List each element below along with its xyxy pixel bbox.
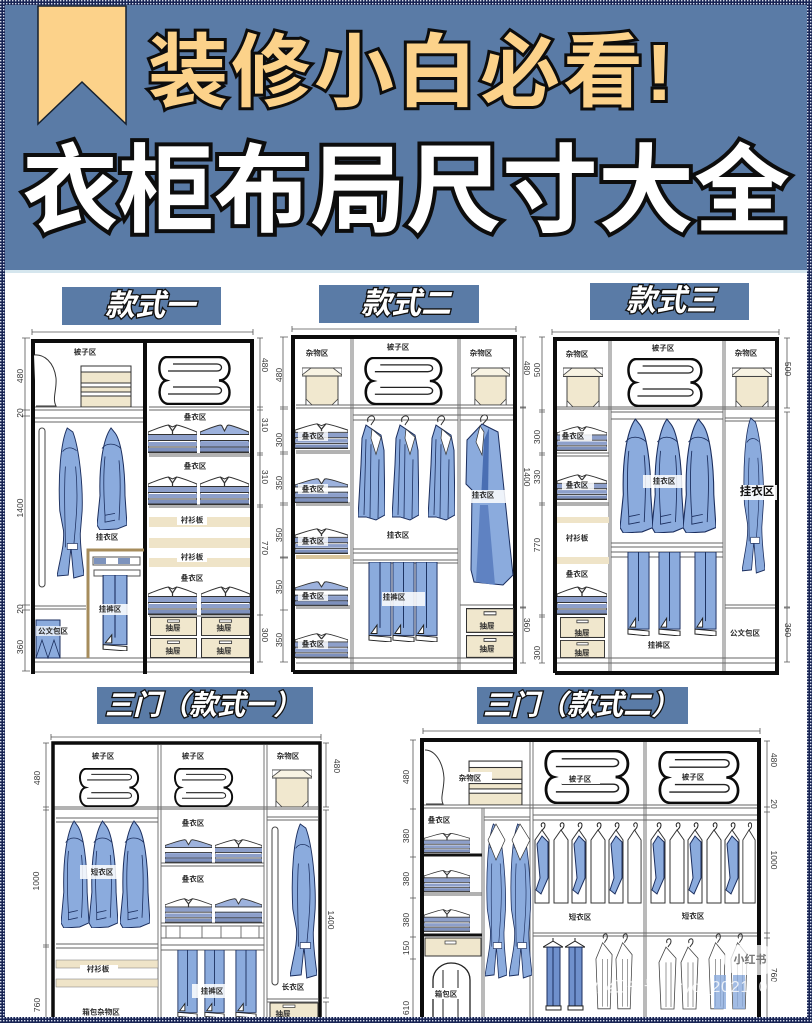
width dimension bbox=[423, 728, 760, 734]
interior shelves and rails bbox=[35, 407, 250, 672]
dimensions left bbox=[31, 743, 49, 1018]
frame bbox=[293, 337, 515, 672]
watermark badge: 小红书 bbox=[734, 952, 766, 966]
dimensions right bbox=[323, 743, 342, 1018]
dimensions left: 20 bbox=[15, 408, 25, 418]
heading: style two bbox=[319, 285, 479, 323]
dimensions left: 480 bbox=[15, 369, 25, 383]
frame bbox=[33, 341, 252, 674]
drawer bbox=[270, 1003, 318, 1018]
folded clothes and shirt boards bbox=[557, 427, 609, 615]
long coat bbox=[290, 824, 317, 978]
hanging jackets: 挂衣区 bbox=[653, 476, 676, 486]
dimensions right (inner): 300 bbox=[260, 628, 270, 642]
folded clothes rows: 叠衣区 bbox=[184, 460, 207, 470]
folded clothes: 叠衣区 bbox=[428, 814, 451, 824]
hanging trousers: 挂裤区 bbox=[201, 986, 224, 996]
dimensions left bbox=[401, 740, 416, 1018]
dimensions right bbox=[764, 741, 779, 1018]
drawers: 抽屉 bbox=[216, 646, 232, 656]
folded clothes column: 叠衣区 bbox=[302, 430, 325, 440]
dimensions left: 350 bbox=[274, 528, 284, 542]
backpack: 箱包区 bbox=[435, 988, 458, 998]
luggage label: 箱包杂物区 bbox=[82, 1006, 120, 1016]
drawer bbox=[425, 938, 481, 956]
frame bbox=[53, 743, 320, 1018]
trousers middle bbox=[543, 934, 632, 1010]
folded clothes column bbox=[295, 424, 348, 658]
right storage label: 杂物区 bbox=[277, 750, 300, 760]
dimensions left: 380 bbox=[401, 829, 411, 843]
quilt label: 被子区 bbox=[387, 342, 410, 352]
dimensions left: 760 bbox=[32, 998, 42, 1012]
folded clothes and shirt boards: 叠衣区 bbox=[566, 568, 589, 578]
short clothes label right: 短衣区 bbox=[682, 910, 705, 920]
dimensions left: 360 bbox=[15, 640, 25, 654]
heading: style one bbox=[62, 287, 221, 325]
dimensions right: 500 bbox=[783, 362, 793, 376]
folded clothes column: 叠衣区 bbox=[302, 590, 325, 600]
drawers: 抽屉 bbox=[480, 644, 495, 654]
dimensions left: 350 bbox=[274, 580, 284, 594]
short hanging shirts middle bbox=[535, 823, 641, 903]
heading: style three bbox=[590, 283, 749, 320]
width dimension bbox=[51, 734, 321, 740]
hanging trousers: 挂裤区 bbox=[648, 640, 671, 650]
quilt middle: 被子区 bbox=[569, 774, 592, 784]
dimensions left bbox=[15, 338, 30, 671]
dimensions right: 480 bbox=[769, 753, 779, 767]
dimensions right: 500 bbox=[532, 363, 542, 377]
hanging label: 挂衣区 bbox=[96, 532, 119, 542]
width dimension bbox=[292, 326, 516, 332]
long coat: 挂衣区 bbox=[472, 490, 495, 500]
shirt boards: 衬衫板 bbox=[181, 552, 204, 562]
folded clothes bbox=[424, 814, 470, 932]
quilt zones bbox=[80, 750, 232, 806]
briefcase area bbox=[36, 620, 70, 658]
icon: quilt bbox=[159, 357, 230, 404]
icon: bookmark ribbon bbox=[38, 6, 126, 124]
right storage label: 杂物区 bbox=[735, 348, 758, 358]
dimensions right: 360 bbox=[783, 623, 793, 637]
wardrobe diagram: style one bbox=[15, 329, 270, 674]
quilt area label: 被子区 bbox=[74, 346, 97, 356]
interior lines bbox=[424, 742, 757, 1018]
hanging jackets: 短衣区 bbox=[91, 866, 114, 876]
drawers bbox=[466, 609, 514, 657]
quilt middle bbox=[546, 751, 628, 803]
hanging jackets bbox=[61, 821, 150, 928]
heading: three-door style one: 三门（款式一） bbox=[105, 690, 301, 720]
drawers: 抽屉 bbox=[574, 648, 590, 658]
dimensions right: 480 bbox=[522, 361, 532, 375]
drawers: 抽屉 bbox=[166, 646, 181, 656]
icon: quilt bbox=[366, 358, 441, 404]
width dimension bbox=[32, 329, 253, 335]
left storage: 杂物区 bbox=[306, 348, 329, 358]
icon: storage box right bbox=[732, 368, 772, 407]
shirt boards: 衬衫板 bbox=[181, 514, 204, 524]
backpack bbox=[432, 963, 470, 1018]
hanging label: 挂衣区 bbox=[387, 530, 410, 540]
left storage: 杂物区 bbox=[566, 348, 589, 358]
hanging trousers bbox=[628, 552, 716, 650]
dimensions right: 480 bbox=[332, 759, 342, 773]
dimensions right: 20 bbox=[769, 799, 779, 809]
shirt boards bbox=[149, 514, 250, 567]
wardrobe diagram: style three bbox=[552, 329, 793, 673]
quilt right: 被子区 bbox=[682, 772, 705, 782]
folded clothes rows: 叠衣区 bbox=[181, 572, 204, 582]
quilt zones: 被子区 bbox=[182, 750, 205, 760]
storage label bbox=[456, 772, 492, 783]
short clothes label: 短衣区 bbox=[569, 912, 592, 922]
heading: style two: 款式二 bbox=[361, 288, 453, 320]
drawers: 抽屉 bbox=[574, 628, 590, 638]
watermark badge bbox=[724, 945, 776, 975]
dimensions right: 770 bbox=[532, 538, 542, 552]
dimensions right (inner): 310 bbox=[260, 418, 270, 432]
icon: duvet bag bbox=[425, 750, 444, 804]
folded clothes column: 叠衣区 bbox=[302, 638, 325, 648]
trouser compartment bbox=[88, 550, 144, 658]
watermark text: 小红书号：ryo_2021103 bbox=[593, 978, 778, 996]
folded clothes rows: 叠衣区 bbox=[184, 412, 207, 422]
icon: jacket bbox=[97, 428, 127, 530]
heading: subtitle: 装修小白必看! bbox=[148, 28, 676, 117]
wardrobe diagram: three-door style one bbox=[31, 734, 342, 1018]
interior lines bbox=[296, 339, 514, 672]
briefcase label: 公文包区 bbox=[730, 628, 760, 638]
drawer: 抽屉 bbox=[276, 1008, 291, 1018]
dimensions right (inner): 480 bbox=[260, 358, 270, 372]
folded clothes: 叠衣区 bbox=[182, 818, 205, 828]
drawers bbox=[150, 617, 249, 658]
icon: hanging rod handle bbox=[39, 428, 45, 587]
dimensions right bbox=[520, 337, 545, 663]
icon: quilt bbox=[628, 359, 701, 406]
dimensions right: 1000 bbox=[769, 851, 779, 870]
interior lines bbox=[54, 745, 318, 1018]
dimensions right (inner): 310 bbox=[260, 470, 270, 484]
heading: style one: 款式一 bbox=[105, 290, 198, 322]
hanging trousers bbox=[369, 562, 437, 642]
header banner bbox=[5, 5, 807, 270]
hanging trousers bbox=[178, 950, 256, 1018]
folded clothes: 叠衣区 bbox=[182, 874, 205, 884]
coat label: 挂衣区 bbox=[740, 484, 775, 498]
long coat bbox=[742, 418, 765, 573]
faint separator under header bbox=[5, 270, 807, 273]
folded clothes and shirt boards: 衬衫板 bbox=[566, 532, 589, 542]
icon: storage box left bbox=[563, 368, 603, 407]
dimensions right: 300 bbox=[532, 646, 542, 660]
icon: duvet bag bbox=[34, 355, 56, 406]
thick shelves bbox=[424, 855, 482, 935]
dimensions left: 380 bbox=[401, 913, 411, 927]
width dimension bbox=[552, 329, 779, 335]
trouser compartment: 挂裤区 bbox=[99, 604, 122, 614]
briefcase area: 公文包区 bbox=[38, 626, 68, 636]
dimensions right: 300 bbox=[532, 430, 542, 444]
folded clothes column: 叠衣区 bbox=[302, 536, 325, 546]
dimensions right (inner): 770 bbox=[260, 541, 270, 555]
dimensions left: 480 bbox=[32, 771, 42, 785]
trousers right bbox=[659, 934, 747, 1009]
dimensions right (inner) bbox=[257, 338, 270, 662]
icon: folded stack bbox=[81, 366, 131, 407]
folded clothes and shirt boards: 叠衣区 bbox=[562, 430, 585, 440]
dimensions left: 380 bbox=[401, 872, 411, 886]
dimensions right: 1400 bbox=[326, 911, 336, 930]
long coats bbox=[485, 824, 532, 978]
dimensions right bbox=[783, 338, 793, 662]
hanging trousers: 挂裤区 bbox=[383, 592, 406, 602]
dimensions left: 610 bbox=[401, 1001, 411, 1015]
icon: long coat bbox=[57, 428, 84, 578]
icon: storage box left bbox=[302, 368, 342, 405]
quilt right bbox=[660, 752, 738, 803]
wardrobe diagram: style two bbox=[274, 326, 545, 672]
dimensions left: 350 bbox=[274, 633, 284, 647]
dimensions left bbox=[274, 337, 288, 662]
icon: storage box bbox=[272, 770, 312, 807]
dimensions left: 480 bbox=[274, 368, 284, 382]
folded clothes rows bbox=[148, 412, 250, 615]
icon: hanging rod handle bbox=[272, 827, 278, 985]
heading: main title: 衣柜布局尺寸大全 bbox=[22, 138, 790, 245]
drawers: 抽屉 bbox=[480, 620, 495, 630]
quilt zones: 被子区 bbox=[92, 750, 115, 760]
short hanging shirts right bbox=[651, 823, 755, 903]
wardrobe diagram: three-door style two bbox=[401, 728, 779, 1018]
dimensions left: 150 bbox=[401, 941, 411, 955]
hanging dresses bbox=[358, 416, 455, 520]
interior lines bbox=[557, 340, 775, 672]
shirt boards bbox=[56, 960, 158, 987]
drawers bbox=[560, 618, 605, 658]
folded clothes and shirt boards: 叠衣区 bbox=[566, 480, 589, 490]
dimensions left: 300 bbox=[274, 433, 284, 447]
dimensions left: 1000 bbox=[31, 871, 41, 890]
folded clothes column: 叠衣区 bbox=[302, 484, 325, 494]
heading: three-door style two: 三门（款式二） bbox=[483, 690, 679, 720]
drawers: 抽屉 bbox=[216, 622, 232, 632]
long coat label: 长衣区 bbox=[282, 982, 305, 992]
right storage label: 杂物区 bbox=[470, 348, 493, 358]
dimensions right: 330 bbox=[532, 470, 542, 484]
shirt boards: 衬衫板 bbox=[87, 964, 110, 974]
quilt label: 被子区 bbox=[652, 342, 675, 352]
dimensions right: 1400 bbox=[522, 468, 532, 487]
dimensions left: 480 bbox=[401, 770, 411, 784]
dimensions left: 20 bbox=[15, 604, 25, 614]
dimensions right: 760 bbox=[769, 968, 779, 982]
dimensions right: 360 bbox=[522, 618, 532, 632]
frame bbox=[422, 740, 759, 1018]
frame bbox=[555, 339, 777, 673]
storage label: 杂物区 bbox=[459, 772, 482, 782]
folded clothes bbox=[165, 818, 262, 923]
long coat bbox=[466, 415, 513, 585]
hanging jackets bbox=[620, 419, 716, 533]
beige shelf bbox=[296, 555, 350, 559]
coat label bbox=[738, 484, 777, 500]
dimensions left: 350 bbox=[274, 476, 284, 490]
drawers: 抽屉 bbox=[166, 622, 181, 632]
heading: style three: 款式三 bbox=[626, 284, 719, 318]
icon: storage box right bbox=[471, 368, 510, 405]
dimensions left: 1400 bbox=[15, 498, 25, 517]
icon: folded stack bbox=[469, 761, 522, 805]
